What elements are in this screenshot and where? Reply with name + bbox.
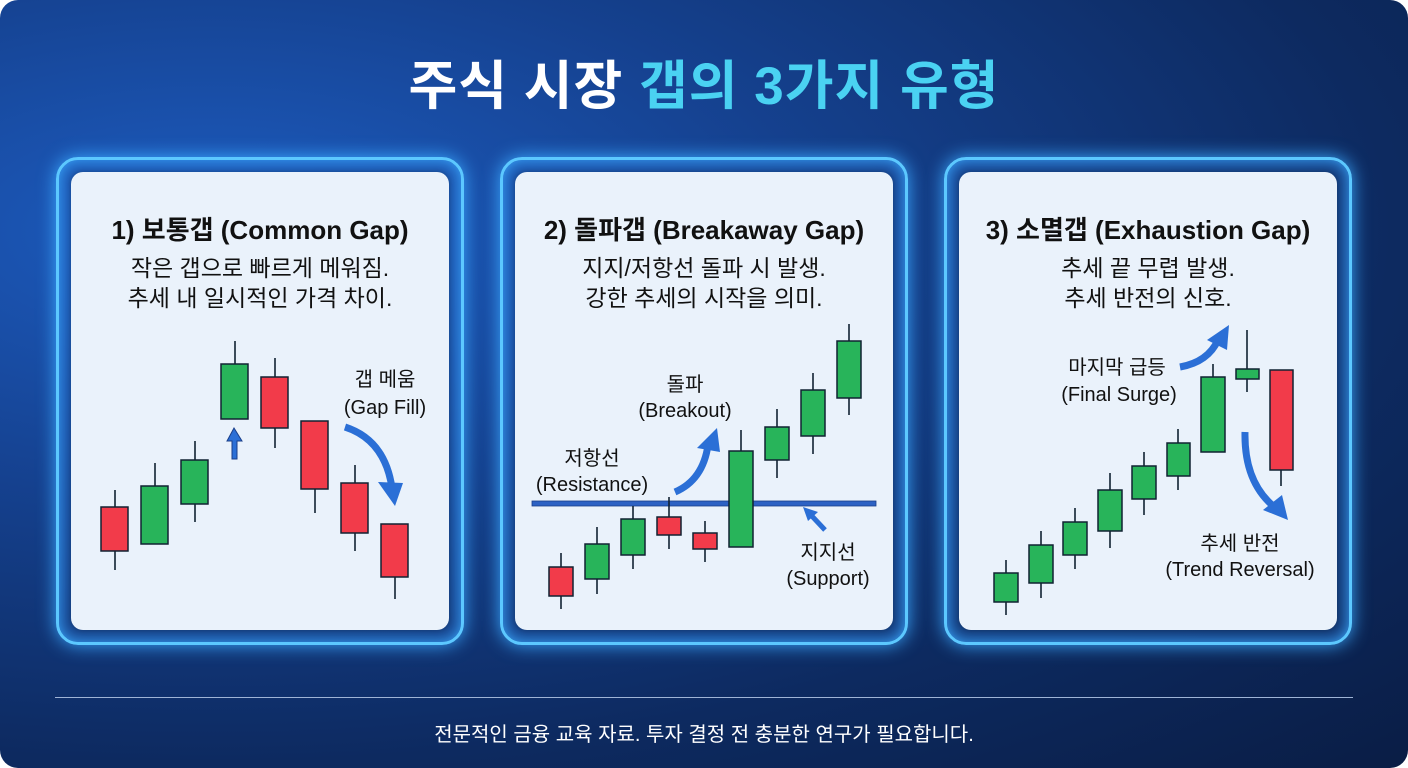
panel: exhaustion gap xyxy=(944,157,1352,645)
label: breakout: (Breakout) xyxy=(638,400,732,422)
title: 주식 시장 갭의 3가지 유형 xyxy=(408,57,1000,116)
label: breakout: 돌파 xyxy=(667,373,703,396)
label: gap fill: 갭 메움 xyxy=(355,368,415,391)
label: trend reversal: 추세 반전 xyxy=(1200,532,1280,555)
label: support xyxy=(786,541,870,590)
footer text: 전문적인 금융 교육 자료. 투자 결정 전 충분한 연구가 필요합니다. xyxy=(434,724,974,746)
heading: common gap: 1) 보통갭 (Common Gap) xyxy=(111,215,409,245)
label: final surge: (Final Surge) xyxy=(1061,384,1177,406)
label: resistance: (Resistance) xyxy=(536,474,648,496)
chart: exhaustion gap candles xyxy=(993,325,1315,615)
label: breakout xyxy=(638,373,732,422)
label: final surge: 마지막 급등 xyxy=(1068,356,1166,379)
heading: breakaway gap: 2) 돌파갭 (Breakaway Gap) xyxy=(544,215,864,245)
description: exhaustion gap: 추세 끝 무렵 발생. xyxy=(1061,255,1235,281)
label: trend reversal: (Trend Reversal) xyxy=(1165,559,1315,581)
label: resistance: 저항선 xyxy=(564,447,620,470)
description: common gap: 작은 갭으로 빠르게 메워짐. xyxy=(131,255,389,281)
heading: exhaustion gap: 3) 소멸갭 (Exhaustion Gap) xyxy=(986,215,1310,245)
icon: small up arrow xyxy=(227,428,242,459)
label: support: (Support) xyxy=(786,568,870,590)
arrow: support pointer xyxy=(803,507,825,530)
chart: breakaway gap candles xyxy=(532,324,876,609)
label: gap fill: (Gap Fill) xyxy=(344,397,426,419)
description: breakaway gap xyxy=(582,255,826,311)
label: support: 지지선 xyxy=(800,541,856,564)
panel: common gap xyxy=(56,157,464,645)
description: exhaustion gap: 추세 반전의 신호. xyxy=(1064,285,1232,311)
description: breakaway gap: 지지/저항선 돌파 시 발생. xyxy=(582,255,826,281)
description: common gap xyxy=(128,255,392,311)
description: exhaustion gap xyxy=(1061,255,1235,311)
arrow: trend reversal xyxy=(1245,432,1288,520)
arrow: final surge xyxy=(1180,325,1229,367)
label: final surge xyxy=(1061,356,1177,406)
panel: breakaway gap xyxy=(500,157,908,645)
chart: common gap candles xyxy=(100,341,426,599)
label: resistance xyxy=(536,447,648,496)
arrow: breakout xyxy=(675,428,720,492)
label: trend reversal xyxy=(1165,532,1315,581)
description: common gap: 추세 내 일시적인 가격 차이. xyxy=(128,285,392,311)
description: breakaway gap: 강한 추세의 시작을 의미. xyxy=(585,285,823,311)
label: gap fill xyxy=(344,368,426,419)
arrow: gap fill xyxy=(345,427,403,506)
